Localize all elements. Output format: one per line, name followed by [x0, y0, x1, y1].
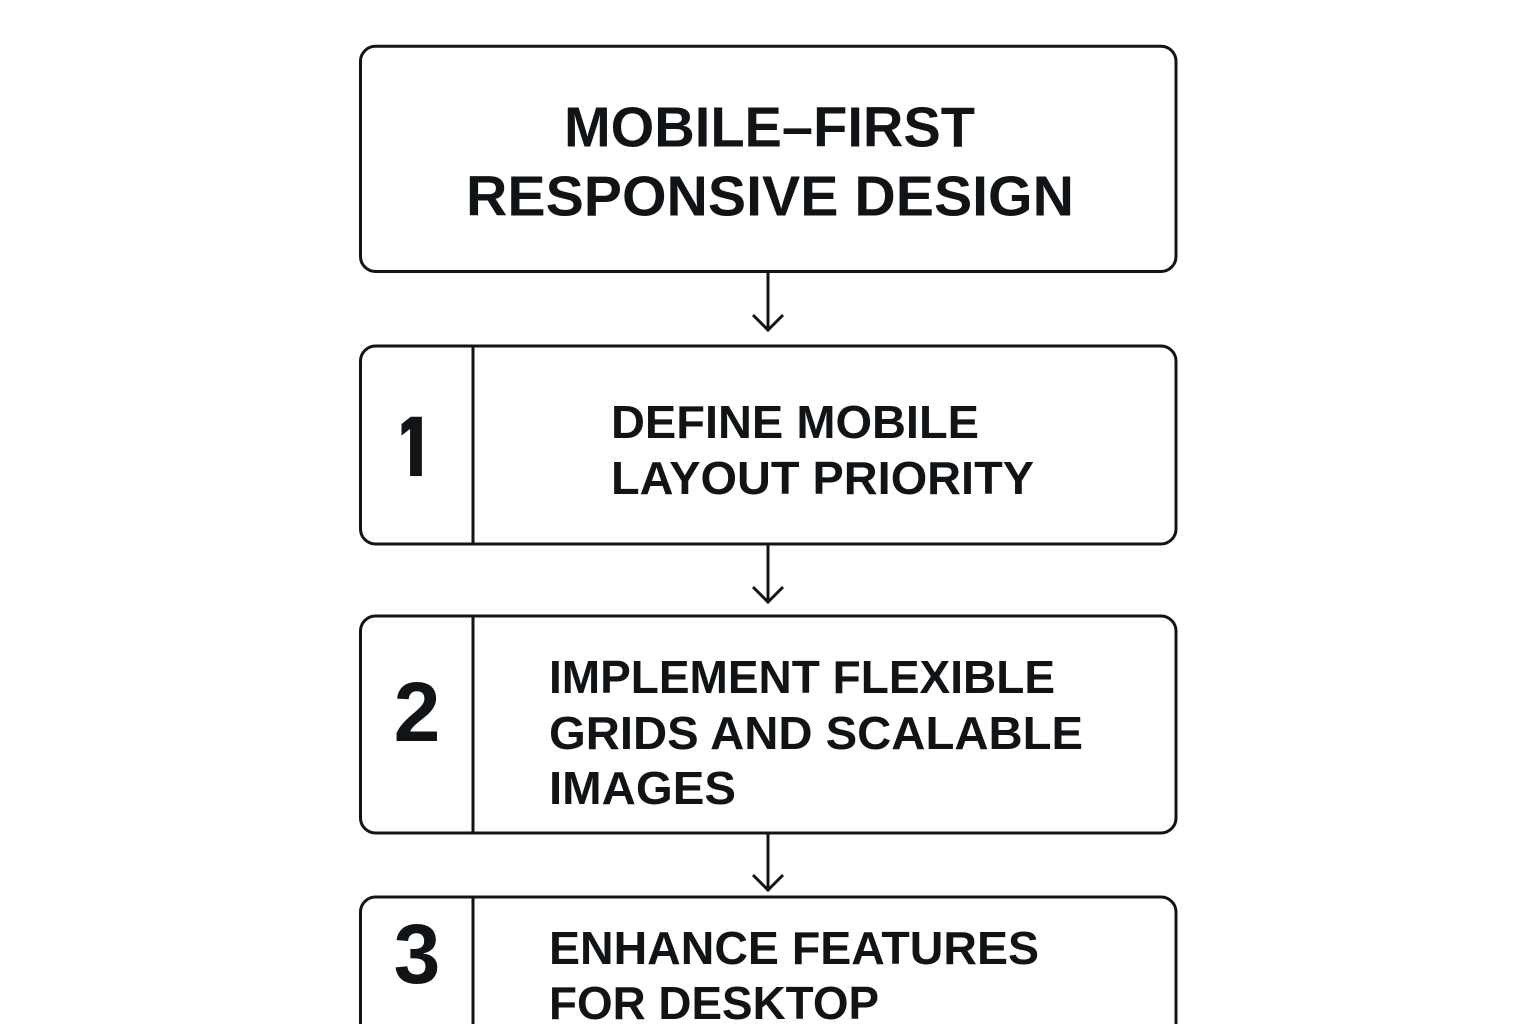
step 1 number: 1	[390, 395, 438, 512]
panel: step 1	[360, 346, 1176, 544]
step 2 text: IMAGES	[549, 762, 736, 814]
step 2 text: GRIDS AND SCALABLE	[549, 707, 1083, 759]
panel: step 2	[360, 616, 1176, 833]
arrow: step 1 to step 2	[753, 545, 783, 602]
title text: MOBILE–FIRST	[564, 96, 975, 160]
arrow: step 2 to step 3	[753, 834, 783, 890]
step 3 number: 3	[394, 907, 440, 1001]
step 1 text: DEFINE MOBILE	[611, 396, 979, 448]
step 3 text: ENHANCE FEATURES	[549, 922, 1039, 974]
panel: step 3	[360, 897, 1176, 1024]
step 1 text: LAYOUT PRIORITY	[611, 452, 1034, 504]
step 2 text: IMPLEMENT FLEXIBLE	[549, 651, 1055, 703]
title text: RESPONSIVE DESIGN	[466, 164, 1074, 228]
title panel	[360, 46, 1176, 271]
step 2 number: 2	[394, 665, 440, 759]
arrow: title to step 1	[753, 273, 783, 330]
